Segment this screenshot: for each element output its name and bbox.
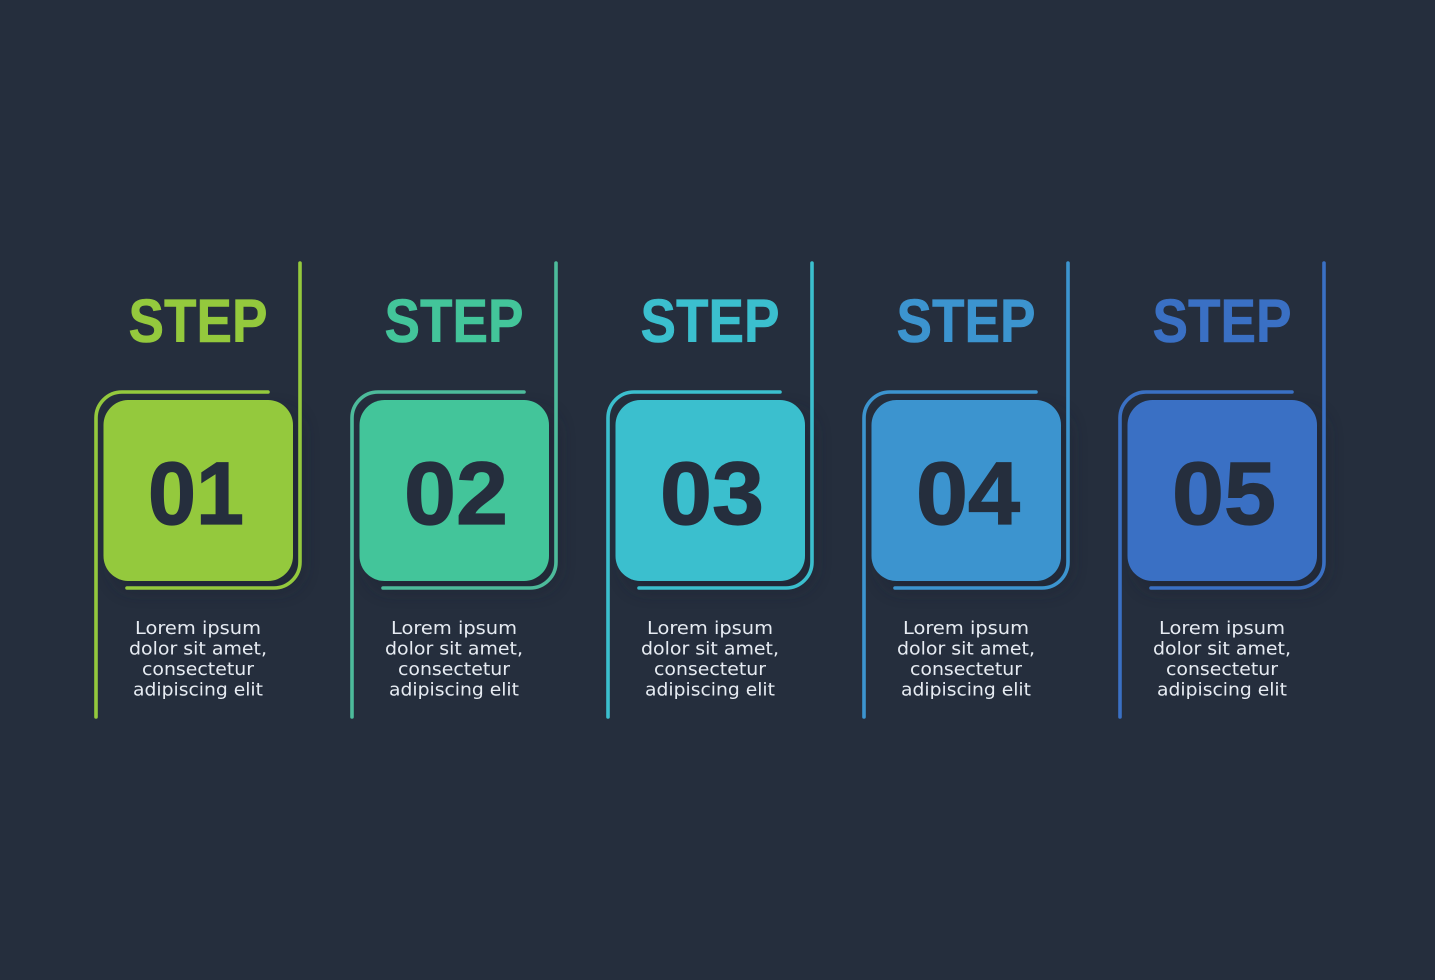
description: step 04: adipiscing elit <box>901 680 1031 700</box>
left and top outline: step 05 <box>1120 392 1292 717</box>
number: step 03: 03 <box>660 443 764 543</box>
description: step 02: Lorem ipsum <box>391 618 517 639</box>
heading: step 04: STEP <box>896 287 1036 355</box>
right and bottom outline: step 03 <box>639 263 812 588</box>
number tile: step 03 <box>616 400 805 581</box>
heading: step 02: STEP <box>384 287 524 355</box>
left and top outline: step 03 <box>608 392 780 717</box>
right and bottom outline: step 01 <box>127 263 300 588</box>
right and bottom outline: step 05 <box>1151 263 1324 588</box>
number tile: step 04 <box>872 400 1061 581</box>
left and top outline: step 04 <box>864 392 1036 717</box>
number: step 01: 01 <box>148 443 244 543</box>
number: step 02: 02 <box>404 443 508 543</box>
description: step 03: Lorem ipsum <box>647 618 773 639</box>
right and bottom outline: step 02 <box>383 263 556 588</box>
description: step 01: adipiscing elit <box>133 680 263 700</box>
number tile: step 02 <box>360 400 549 581</box>
description: step 01: Lorem ipsum <box>135 618 261 639</box>
shadow: step 05 <box>1136 410 1326 591</box>
panel: step 02 <box>352 263 558 717</box>
number tile: step 01 <box>104 400 293 581</box>
number: step 04: 04 <box>916 443 1021 543</box>
description: step 01: consectetur <box>142 659 255 680</box>
description: step 03: adipiscing elit <box>645 680 775 700</box>
description: step 05: adipiscing elit <box>1157 680 1287 700</box>
panel: step 01 <box>96 263 302 717</box>
shadow: step 03 <box>624 410 814 591</box>
description: step 04: Lorem ipsum <box>903 618 1029 639</box>
shadow: step 01 <box>112 410 302 591</box>
panel: step 03 <box>608 263 814 717</box>
description: step 05: Lorem ipsum <box>1159 618 1285 639</box>
description: step 04: consectetur <box>910 659 1023 680</box>
panel: step 05 <box>1120 263 1326 717</box>
shadow: step 04 <box>880 410 1070 591</box>
description: step 05: consectetur <box>1166 659 1279 680</box>
right and bottom outline: step 04 <box>895 263 1068 588</box>
description: step 01: dolor sit amet, <box>129 638 267 660</box>
left and top outline: step 01 <box>96 392 268 717</box>
left and top outline: step 02 <box>352 392 524 717</box>
description: step 02: adipiscing elit <box>389 680 519 700</box>
description: step 05: dolor sit amet, <box>1153 638 1291 660</box>
description: step 02: dolor sit amet, <box>385 638 523 660</box>
panel: step 04 <box>864 263 1070 717</box>
description: step 03: consectetur <box>654 659 767 680</box>
number: step 05: 05 <box>1172 443 1276 543</box>
number tile: step 05 <box>1128 400 1317 581</box>
description: step 03: dolor sit amet, <box>641 638 779 660</box>
description: step 04: dolor sit amet, <box>897 638 1035 660</box>
description: step 02: consectetur <box>398 659 511 680</box>
heading: step 01: STEP <box>128 287 268 355</box>
shadow: step 02 <box>368 410 558 591</box>
heading: step 03: STEP <box>640 287 780 355</box>
heading: step 05: STEP <box>1152 287 1292 355</box>
